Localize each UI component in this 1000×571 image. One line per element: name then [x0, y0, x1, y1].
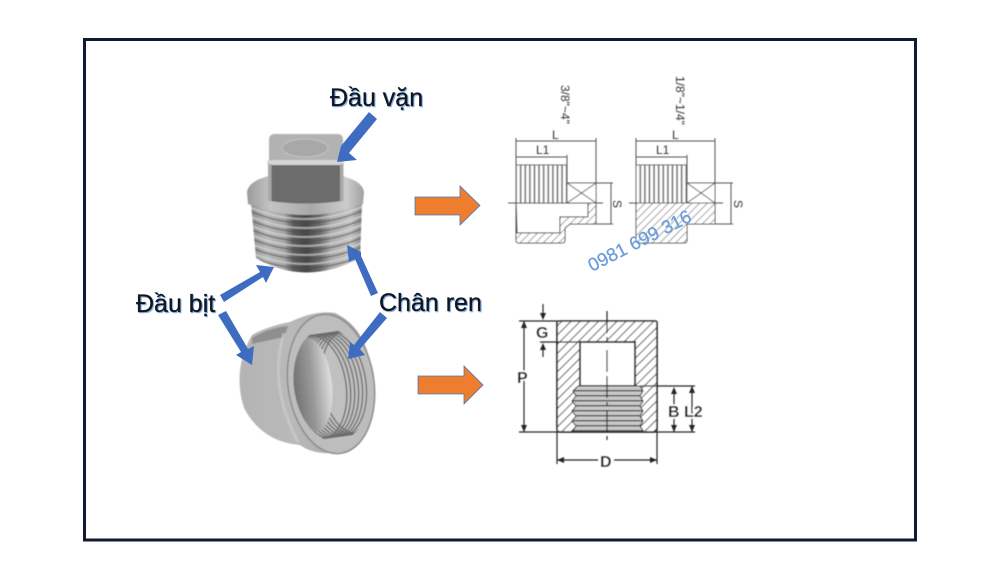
arrow: orange bottom	[418, 366, 483, 404]
plug square head	[267, 134, 344, 204]
arrow: Chân ren to plug	[347, 245, 378, 296]
cap dimension labels: L2	[684, 404, 703, 421]
section: 3/8 to 4 inch	[508, 138, 613, 243]
technical drawing: cap section	[517, 304, 703, 471]
arrow: to square head	[337, 112, 377, 162]
label: Chân ren: Chân ren	[380, 290, 483, 318]
arrow: Chân ren to cap	[348, 312, 387, 359]
technical drawing: plug sections	[508, 76, 745, 243]
plug collar	[247, 173, 364, 215]
arrow: orange top	[415, 186, 480, 225]
plug threaded body	[245, 203, 366, 272]
size and dimension labels	[536, 76, 745, 208]
size and dimension labels: L	[552, 128, 559, 142]
arrow: Đầu bịt to plug	[220, 265, 274, 302]
size and dimension labels: 1/8"~1/4"	[673, 76, 687, 125]
cap dimension labels: B	[668, 404, 680, 421]
cap dimension labels: D	[600, 454, 612, 471]
size and dimension labels: L1	[656, 143, 670, 157]
label: Đầu vặn: Đầu vặn	[331, 85, 424, 113]
label: Đầu bịt: Đầu bịt	[136, 290, 215, 318]
size and dimension labels: S	[731, 200, 745, 208]
photo: threaded cap	[239, 312, 376, 455]
frame border	[84, 40, 916, 540]
cap inner bore	[294, 338, 333, 432]
cap rim and opening	[279, 309, 383, 459]
arrow: Đầu bịt to cap	[218, 311, 254, 365]
cap dimension labels: P	[517, 370, 528, 387]
label: Đầu bịt: Đầu bịt	[137, 291, 216, 319]
size and dimension labels: L	[672, 128, 679, 142]
watermark phone number: 0981 699 316	[584, 205, 695, 276]
size and dimension labels: 3/8"~4"	[558, 85, 572, 124]
size and dimension labels: S	[610, 200, 624, 208]
cap internal threads	[306, 330, 368, 440]
section: 1/8 to 1/4 inch	[629, 138, 733, 243]
cap dimension labels	[517, 325, 703, 471]
label: Chân ren: Chân ren	[379, 289, 482, 317]
label: Đầu vặn: Đầu vặn	[330, 84, 423, 112]
cap dimension labels: G	[536, 325, 548, 342]
cap outer shell	[240, 312, 373, 453]
size and dimension labels: L1	[536, 143, 550, 157]
photo: square head plug	[245, 134, 366, 272]
